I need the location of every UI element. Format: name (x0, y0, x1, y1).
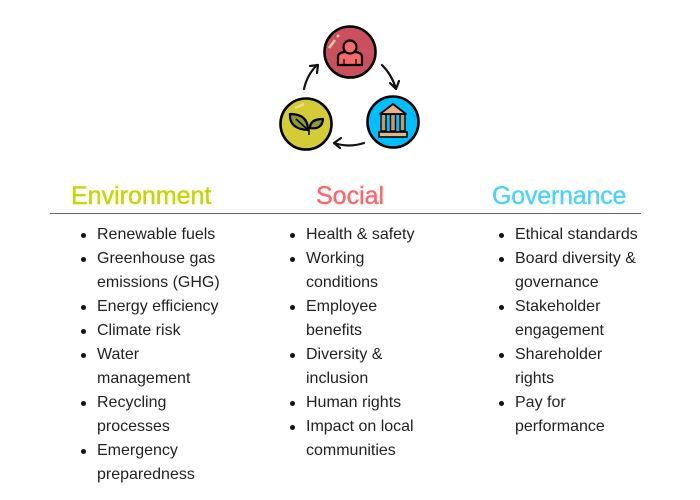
list: governance items: Stakeholder (515, 298, 600, 315)
list: social items: Diversity & (306, 346, 382, 363)
list: environment items: Renewable fuels (97, 226, 215, 243)
list: social items (290, 226, 414, 459)
heading: Governance: Governance (492, 182, 626, 210)
list: governance items: Pay for (515, 394, 566, 411)
list: environment items (81, 226, 220, 483)
arrow: governance to environment (334, 138, 364, 148)
list: environment items: emissions (GHG) (97, 274, 220, 291)
list: social items: benefits (306, 322, 362, 339)
list: governance items: Ethical standards (515, 226, 638, 243)
list: environment items: Water (97, 346, 139, 363)
list: environment items: Energy efficiency (97, 298, 219, 315)
list: environment items: Climate risk (97, 322, 181, 339)
list: governance items: rights (515, 370, 554, 387)
list: social items: Employee (306, 298, 377, 315)
arrow: environment to social (304, 65, 318, 89)
heading: Social: Social (316, 182, 384, 210)
list: social items: Human rights (306, 394, 401, 411)
arrow: social to governance (382, 65, 399, 89)
list: environment items: Recycling (97, 394, 166, 411)
cycle diagram (279, 25, 420, 151)
divider line (50, 213, 641, 214)
list: environment items: processes (97, 418, 170, 435)
list: governance items: governance (515, 274, 599, 291)
list: social items: Impact on local (306, 418, 414, 435)
list: governance items: Shareholder (515, 346, 602, 363)
list: environment items: management (97, 370, 190, 387)
icon: social person (324, 26, 376, 78)
list: governance items (499, 226, 638, 435)
list: environment items: preparedness (97, 466, 195, 483)
list: social items: inclusion (306, 370, 368, 387)
list: environment items: Emergency (97, 442, 178, 459)
heading: Environment: Environment (71, 182, 211, 210)
list: social items: conditions (306, 274, 378, 291)
icon: governance building (368, 96, 418, 148)
list: social items: Health & safety (306, 226, 414, 243)
list: environment items: Greenhouse gas (97, 250, 215, 267)
list: governance items: Board diversity & (515, 250, 636, 267)
list: social items: communities (306, 442, 396, 459)
list: governance items: performance (515, 418, 605, 435)
list: governance items: engagement (515, 322, 604, 339)
list: social items: Working (306, 250, 364, 267)
icon: environment leaves (280, 98, 332, 150)
